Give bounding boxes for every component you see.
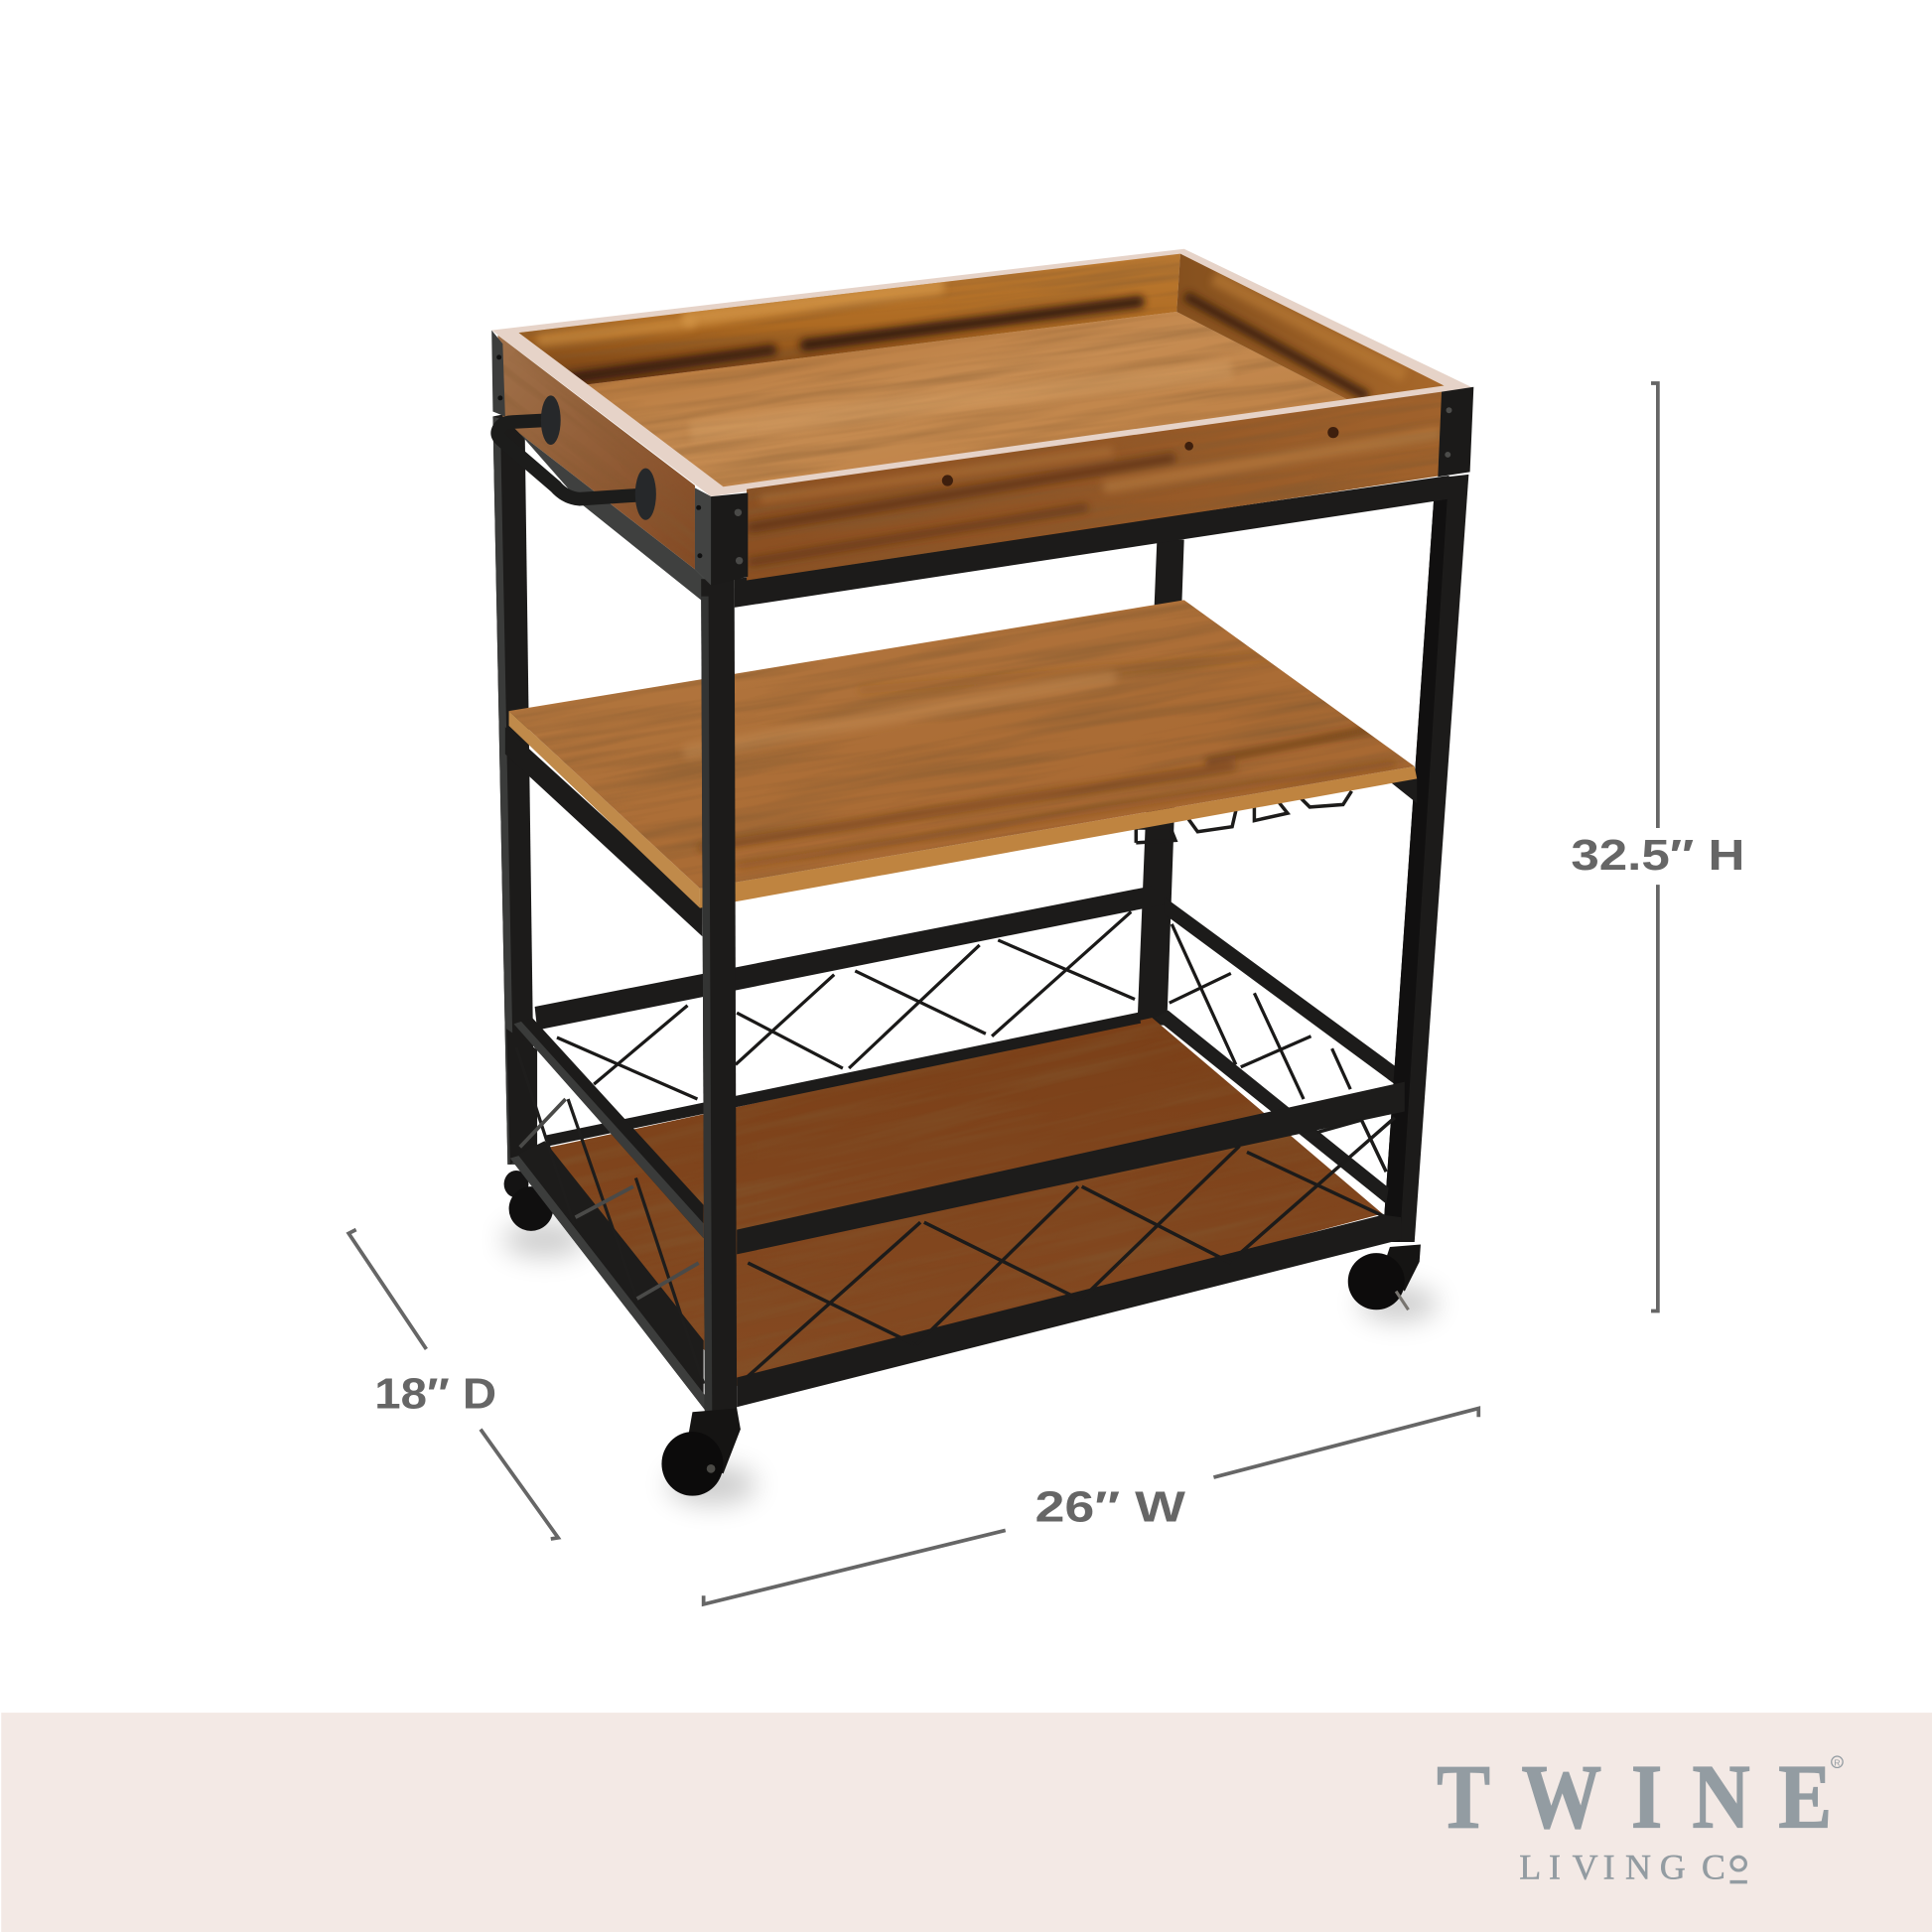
glass rack hooks xyxy=(1136,791,1351,843)
back wire lattice xyxy=(557,911,1135,1099)
front leg xyxy=(701,579,737,1417)
tray side frame bar xyxy=(520,434,712,600)
height line xyxy=(1651,383,1658,1311)
width line xyxy=(704,1409,1478,1604)
left back leg xyxy=(492,414,535,1165)
right side wire lattice xyxy=(1170,924,1350,1099)
front caster xyxy=(661,1409,741,1496)
top front crossbar xyxy=(735,476,1449,608)
lower bottom left bar xyxy=(510,1141,709,1415)
middle wood shelf xyxy=(508,600,1418,908)
tray right wall xyxy=(1176,254,1445,399)
corner bracket: front xyxy=(695,487,748,586)
registered mark xyxy=(1832,1756,1843,1767)
tray front face xyxy=(747,391,1442,580)
corner bracket: left xyxy=(491,331,505,416)
floor shadows xyxy=(502,1222,1438,1504)
tray back wall xyxy=(518,254,1180,385)
front wire lattice xyxy=(748,1118,1395,1376)
back left caster xyxy=(504,1171,553,1231)
lower front mid bar xyxy=(737,1082,1405,1254)
back leg xyxy=(1138,540,1184,1026)
right caster xyxy=(1348,1244,1421,1310)
width label: 26″ W xyxy=(1035,1484,1185,1532)
dimension: width xyxy=(704,1409,1478,1604)
lower back shelf rail xyxy=(546,1018,1140,1141)
tray handle xyxy=(497,395,656,520)
registered mark: R xyxy=(1834,1757,1841,1767)
dimension: height xyxy=(1571,383,1744,1311)
tray rim xyxy=(491,249,1473,496)
lower right bottom rail xyxy=(1308,1139,1389,1204)
logo small o with underline xyxy=(1729,1857,1747,1883)
logo wordmark: TWINE xyxy=(1437,1746,1832,1848)
height label: 32.5″ H xyxy=(1571,832,1744,880)
footer band xyxy=(1,1713,1932,1932)
left side wire lattice xyxy=(516,1047,704,1384)
dimension: depth xyxy=(348,1230,558,1539)
corner bracket: right xyxy=(1438,387,1473,477)
tray floor xyxy=(588,312,1346,486)
lower right top bar xyxy=(1165,897,1400,1084)
shelf side support xyxy=(505,727,702,936)
logo subline: LIVING C xyxy=(1519,1848,1725,1887)
right leg xyxy=(1382,475,1468,1242)
tray left outer side xyxy=(497,336,695,570)
tray xyxy=(491,248,1473,586)
lower front bottom bar xyxy=(737,1215,1401,1407)
lower back top bar xyxy=(535,886,1165,1031)
lower wood shelf xyxy=(550,1018,1382,1386)
lower right shelf rail xyxy=(1155,1011,1389,1204)
lower left post xyxy=(506,1029,537,1165)
depth line xyxy=(348,1230,558,1539)
shelf right support stub xyxy=(1386,778,1417,803)
depth label: 18″ D xyxy=(374,1371,496,1419)
logo xyxy=(1437,1746,1843,1887)
lower left side bar xyxy=(514,1018,704,1238)
